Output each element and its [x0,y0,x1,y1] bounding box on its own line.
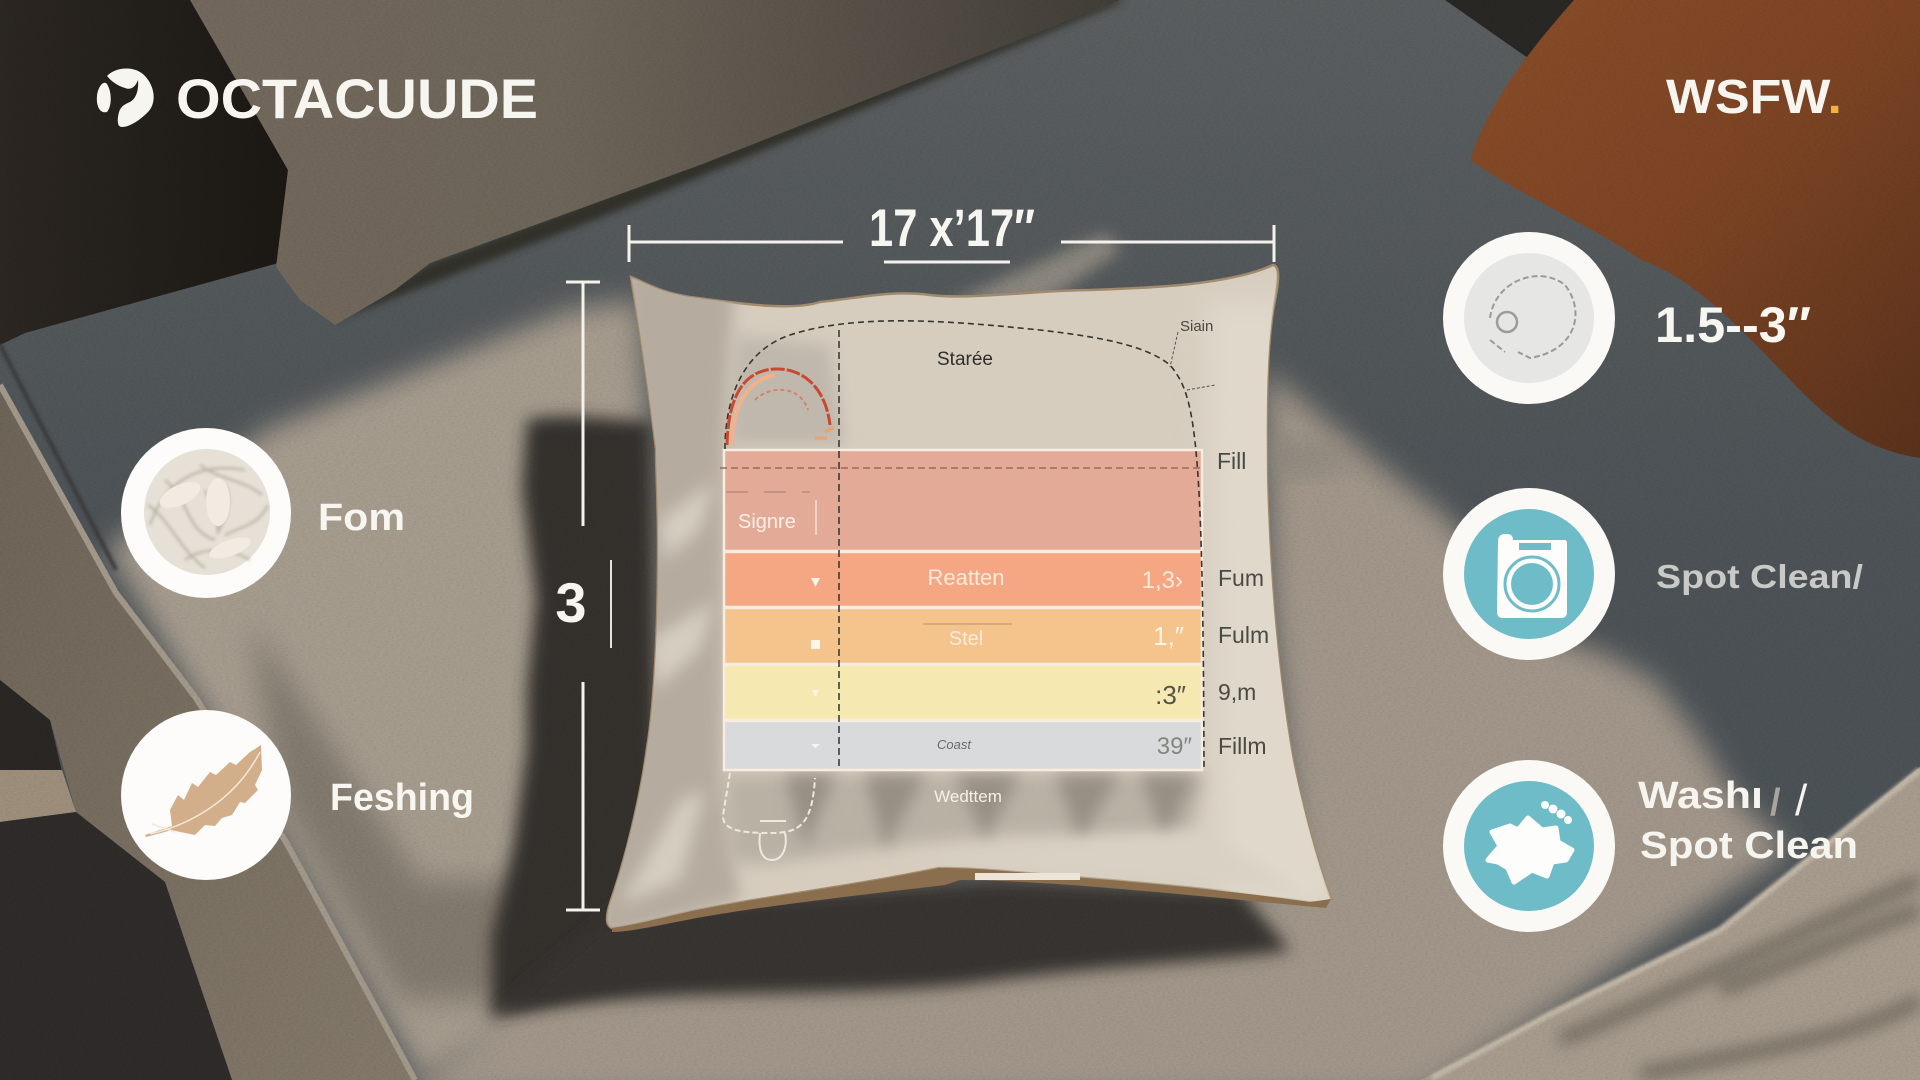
pillow annotations: Fill [1217,448,1246,474]
pillow with measurement diagram [600,265,1340,940]
layer: yellow [724,665,1202,720]
label: Feshing: Feshing [330,777,474,819]
measurement layers stack: 1,″ [1153,621,1184,651]
icon: foam fibre ball [121,428,291,598]
measurement layers stack: 1,3› [1142,567,1183,594]
logo wordmark: OCTACUUDE [176,67,538,130]
width dimension [629,199,1274,262]
label: Fom: Fom [318,497,405,539]
care: wash spot clean [1443,760,1858,932]
pillow annotations [934,318,1269,806]
spec: thickness [1443,232,1811,404]
pillow annotations: Fulm [1218,622,1269,648]
label: 1.5--3: 1.5--3″ [1655,297,1811,353]
logo mark [97,68,154,127]
label: Wash / Spot Clean: Washı [1638,775,1763,817]
label: Wash / Spot Clean: / [1770,782,1781,824]
measurement layers stack: Coast [937,737,972,752]
label: Wash / Spot Clean: / [1795,776,1808,825]
pillow annotations: Starée [937,349,993,370]
bottom tab sketch [723,773,815,860]
icon: washing machine [1443,488,1615,660]
icon: feather [121,710,291,880]
pillow annotations: Fum [1218,565,1264,591]
top right brand mark: WSFW . [1666,71,1842,124]
measurement layers stack [720,330,1204,770]
measurement layers stack: 39″ [1157,733,1192,760]
measurement layers stack: Signre [738,511,796,533]
pillow annotations: Siain [1180,318,1213,335]
pillow annotations: Wedttem [934,787,1002,806]
pillow annotations: Fillm [1218,733,1267,759]
label: Wash / Spot Clean: Spot Clean [1640,825,1858,867]
icon: thickness gauge [1443,232,1615,404]
pillow body [600,265,1340,940]
measurement layers stack: Reatten [927,565,1005,590]
logo [97,67,538,130]
label: Spot Clean/: Spot Clean/ [1656,558,1863,595]
fill option: feather [121,710,474,880]
fill option: foam [121,428,405,598]
label: Wash / Spot Clean [1638,775,1858,867]
height dimension [555,282,611,910]
layer: grey [724,721,1202,770]
measurement layers stack: Stel [949,628,983,650]
pillow annotations: 9,m [1218,679,1256,705]
dashed outline [725,321,1204,770]
layer: orange [724,552,1202,607]
measurement layers stack: :3″ [1155,680,1186,710]
layer: light orange [724,608,1202,664]
care: spot clean [1443,488,1863,660]
red arc sketch [727,369,833,445]
layer: top fill [724,450,1202,551]
icon: stain splat [1443,760,1615,932]
height dimension: 3 [555,571,587,634]
width dimension: 17 x’17″ [869,199,1035,258]
